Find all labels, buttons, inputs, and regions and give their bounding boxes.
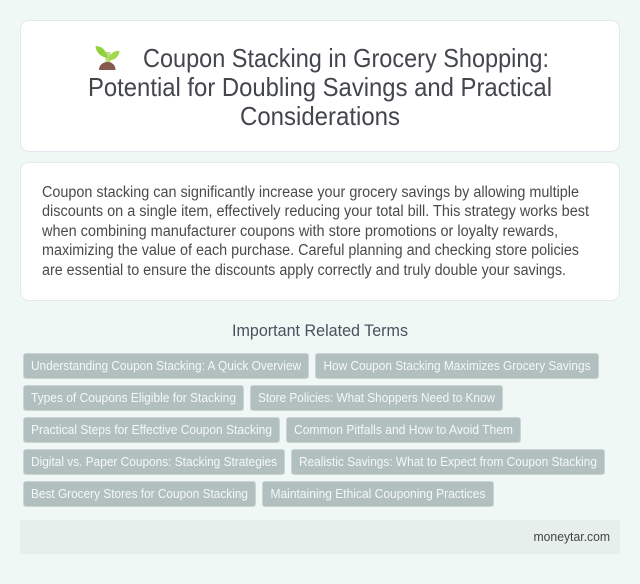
- tag: Store Policies: What Shoppers Need to Know: [258, 390, 495, 405]
- tag: Common Pitfalls and How to Avoid Them: [294, 422, 513, 437]
- text block: summary: are essential to ensure the discounts apply correctly and truly double your savings.: [42, 262, 566, 279]
- tag: Digital vs. Paper Coupons: Stacking Strategies: [31, 454, 277, 469]
- tag: Practical Steps for Effective Coupon Stacking: [31, 422, 272, 437]
- tag: How Coupon Stacking Maximizes Grocery Savings: [324, 358, 591, 373]
- footer: moneytar.com: [534, 529, 610, 544]
- tag list: related terms: [24, 354, 604, 506]
- tag: Best Grocery Stores for Coupon Stacking: [31, 486, 248, 501]
- heading: title: Considerations: [240, 101, 400, 131]
- tag: [24, 482, 256, 506]
- text block: summary: [41, 184, 590, 279]
- text block: summary: Coupon stacking can significantly increase your grocery savings by allowing multiple: [42, 184, 579, 201]
- panel: summary card: [20, 162, 620, 300]
- tag: [24, 354, 308, 378]
- tag: [24, 386, 244, 410]
- tag: Types of Coupons Eligible for Stacking: [31, 390, 236, 405]
- heading: title: Potential for Doubling Savings and Practical: [88, 72, 552, 102]
- tag: [24, 450, 284, 474]
- heading: title: [88, 43, 552, 131]
- tag: [286, 418, 520, 442]
- tag: [262, 482, 494, 506]
- text block: summary: maximizing the value of each purchase. Careful planning and checking store policies: [42, 242, 579, 259]
- tag: [316, 354, 598, 378]
- heading: related terms: Important Related Terms: [232, 321, 408, 340]
- text block: summary: when combining manufacturer coupons with store promotions or loyalty rewards,: [41, 223, 558, 240]
- tag: Realistic Savings: What to Expect from Coupon Stacking: [299, 454, 597, 469]
- tag: Understanding Coupon Stacking: A Quick Overview: [31, 358, 301, 373]
- tag: [24, 418, 280, 442]
- icon: seedling: [96, 46, 120, 70]
- text block: summary: discounts on a single item, effectively reducing your total bill. This strategy works best: [42, 203, 590, 220]
- tag: [292, 450, 604, 474]
- tag: [250, 386, 502, 410]
- heading: title: Coupon Stacking in Grocery Shopping:: [143, 43, 549, 73]
- panel: title card: [20, 20, 620, 152]
- tag: Maintaining Ethical Couponing Practices: [270, 486, 486, 501]
- footer: [20, 520, 620, 554]
